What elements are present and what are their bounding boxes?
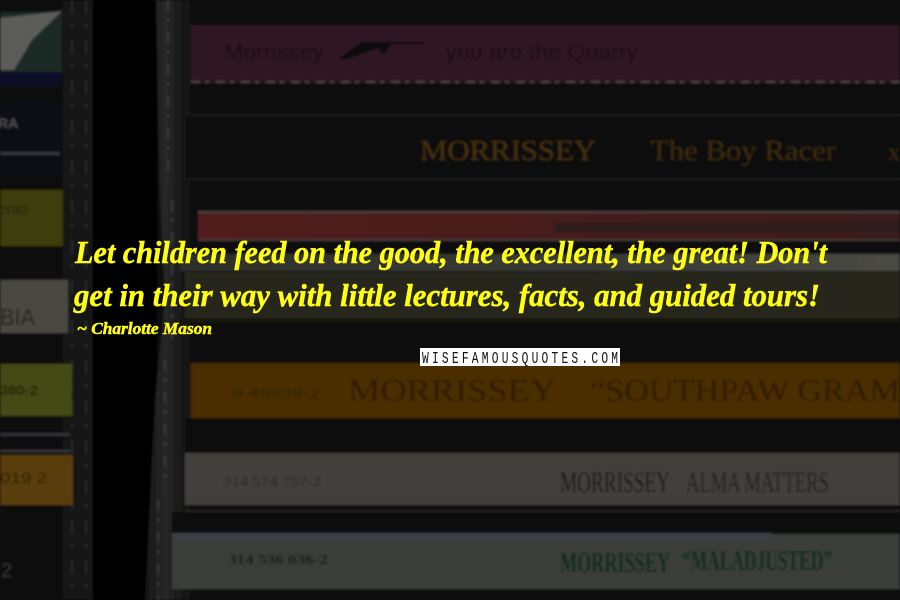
spine: Morrissey Southpaw Grammar [191, 363, 900, 418]
left stack: BIA spine: BIA [0, 304, 36, 330]
spine: Morrissey Maladjusted: MORRISSEY [560, 547, 670, 579]
spine: red band [198, 211, 900, 241]
left stack: RA spine [0, 102, 63, 176]
left stack: lime spine [0, 364, 72, 416]
left stack: silver spine [0, 11, 62, 86]
dark gap between stacks [92, 0, 157, 600]
left stack: orange spine [0, 433, 73, 505]
right stack case edges [145, 0, 190, 600]
left stack: bottom spine [0, 540, 62, 600]
quote line 1: Let children feed on the good, the excellent, the great! Don't [74, 234, 828, 270]
spine: Morrissey you are the Quarry: Morrissey you are the Quarry [224, 41, 639, 64]
spine: Morrissey Southpaw Grammar: “SOUTHPAW GRAM [590, 372, 900, 408]
spine: Morrissey Alma Matters: MORRISSEY [560, 466, 670, 499]
quote line 2: get in their way with little lectures, facts, and guided tours! [73, 277, 820, 313]
left stack: lime spine: 360-2 [0, 382, 38, 398]
spine: Morrissey The Boy Racer: x [888, 140, 900, 166]
spine: grey band [180, 254, 900, 323]
watermark badge: WISEFAMOUSQUOTES.COM [422, 350, 618, 369]
left stack: BIA spine [0, 280, 68, 333]
spine: Morrissey The Boy Racer: The Boy Racer [650, 136, 837, 167]
spine: Morrissey Maladjusted: 314 536 036-2 [228, 553, 328, 568]
left stack: orange spine: 019 2 [0, 470, 47, 487]
left stack: bottom spine: 2 [1, 560, 12, 582]
spine: Morrissey The Boy Racer [186, 114, 900, 180]
spine: Morrissey Southpaw Grammar: 9 45939-2 [232, 385, 320, 402]
left stack case edges [63, 0, 93, 600]
attribution: ~ Charlotte Mason [77, 319, 212, 338]
spine: Morrissey The Boy Racer: MORRISSEY [420, 136, 596, 167]
spine: Morrissey Alma Matters: 314 574 757-2 [223, 475, 321, 490]
spine: Morrissey Maladjusted [172, 533, 900, 589]
left stack: olive spine [0, 190, 63, 246]
spine: Morrissey Alma Matters [185, 453, 900, 512]
spine: Morrissey Southpaw Grammar: MORRISSEY [348, 372, 556, 408]
spine: Morrissey you are the Quarry [191, 25, 900, 83]
quote text [73, 234, 828, 338]
